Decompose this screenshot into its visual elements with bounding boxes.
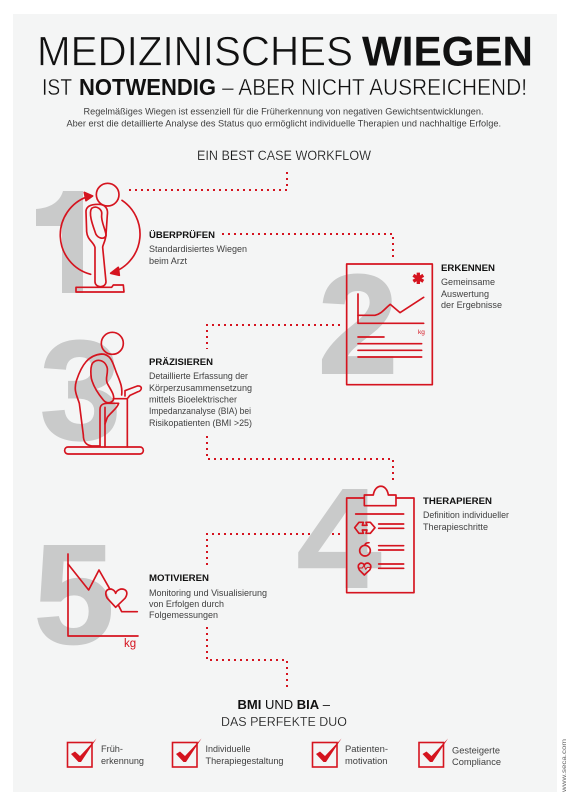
intro text: Aber erst die detaillierte Analyse des Status quo ermöglicht individuelle Therapien und nachhaltige Erfolge. (66, 118, 501, 130)
check item 1: Früh- (101, 744, 123, 755)
icon: medical report (347, 264, 432, 385)
step 3 text: Risikopatienten (BMI >25) (149, 418, 252, 429)
title: MEDIZINISCHES (37, 28, 353, 74)
step 3 text: mittels Bioelektrischer (149, 394, 237, 406)
step 1 text: beim Arzt (149, 256, 187, 267)
icon: person on bia device (65, 332, 143, 454)
step 3 text: Detaillierte Erfassung der (149, 371, 248, 382)
connector: step 2 to step 3 (207, 325, 340, 349)
step 5 text: Monitoring und Visualisierung (149, 588, 267, 599)
title: WIEGEN (362, 28, 533, 74)
connector: step 4 to step 5 (207, 534, 340, 566)
step 4 numeral: 4 (297, 459, 381, 617)
step 5 text (149, 573, 267, 621)
check item 2: Individuelle (206, 744, 250, 755)
step 4 text (423, 496, 509, 533)
connector: step 1 to step 2 (222, 234, 393, 257)
subtitle: NOTWENDIG (79, 74, 216, 100)
step 1 numeral: 1 (28, 164, 106, 322)
check item 3 (312, 738, 388, 767)
workflow heading: EIN BEST CASE WORKFLOW (197, 148, 371, 163)
step 2 text: ERKENNEN (441, 263, 495, 274)
step 4 text: Therapieschritte (423, 522, 488, 533)
title (37, 28, 533, 74)
check item 1 (68, 738, 144, 767)
check item 3: Patienten- (345, 744, 388, 755)
subtitle: – ABER NICHT AUSREICHEND! (222, 74, 527, 100)
kg label report: kg (418, 329, 425, 336)
icon: person on scale (60, 183, 140, 292)
subtitle (42, 74, 527, 100)
kg label chart: kg (124, 638, 136, 650)
vertical website credit: www.seca.com (561, 739, 568, 793)
intro text (66, 106, 501, 130)
step 5 text: MOTIVIEREN (149, 573, 209, 584)
step 2 text: der Ergebnisse (441, 300, 502, 311)
icon: clipboard (347, 486, 414, 593)
step 2 numeral: 2 (318, 245, 398, 403)
step 2 text (441, 263, 502, 311)
step 4 text: Definition individueller (423, 510, 509, 521)
step 1 numeral (36, 191, 83, 293)
subtitle: IST (42, 74, 72, 100)
summary heading: BMI UND BIA – (238, 697, 331, 712)
summary heading (221, 697, 347, 729)
step 3 text: Körperzusammensetzung (149, 383, 252, 394)
step 1 text: ÜBERPRÜFEN (149, 230, 215, 241)
step 1 text (149, 230, 247, 267)
check item 2 (172, 738, 284, 767)
step 3 text: PRÄZISIEREN (149, 357, 213, 368)
connector: start to step 1 (129, 168, 287, 190)
step 3 numeral: 3 (40, 311, 121, 469)
check item 2: Therapiegestaltung (206, 756, 284, 767)
check item 4: Compliance (452, 757, 501, 768)
summary heading: DAS PERFEKTE DUO (221, 714, 347, 729)
step 3 text (149, 357, 252, 429)
step 4 text: THERAPIEREN (423, 496, 492, 507)
step 5 text: von Erfolgen durch (149, 599, 224, 610)
step 5 text: Folgemessungen (149, 610, 218, 621)
intro text: Regelmäßiges Wiegen ist essenziell für die Früherkennung von negativen Gewichtsentwicklungen. (84, 106, 484, 118)
check item 4 (419, 738, 501, 768)
step 1 text: Standardisiertes Wiegen (149, 244, 247, 255)
step 2 text: Auswertung (441, 289, 489, 300)
check item 3: motivation (345, 756, 388, 767)
connector: step 3 to step 4 (207, 436, 393, 482)
check item 4: Gesteigerte (452, 746, 500, 756)
step 5 numeral: 5 (34, 515, 114, 673)
step 3 text: Impedanzanalyse (BIA) bei (149, 406, 251, 417)
connector: step 5 to summary (207, 627, 287, 690)
icon: weight chart with heart (68, 554, 138, 636)
step 2 text: Gemeinsame (441, 277, 495, 288)
check item 1: erkennung (101, 756, 144, 767)
